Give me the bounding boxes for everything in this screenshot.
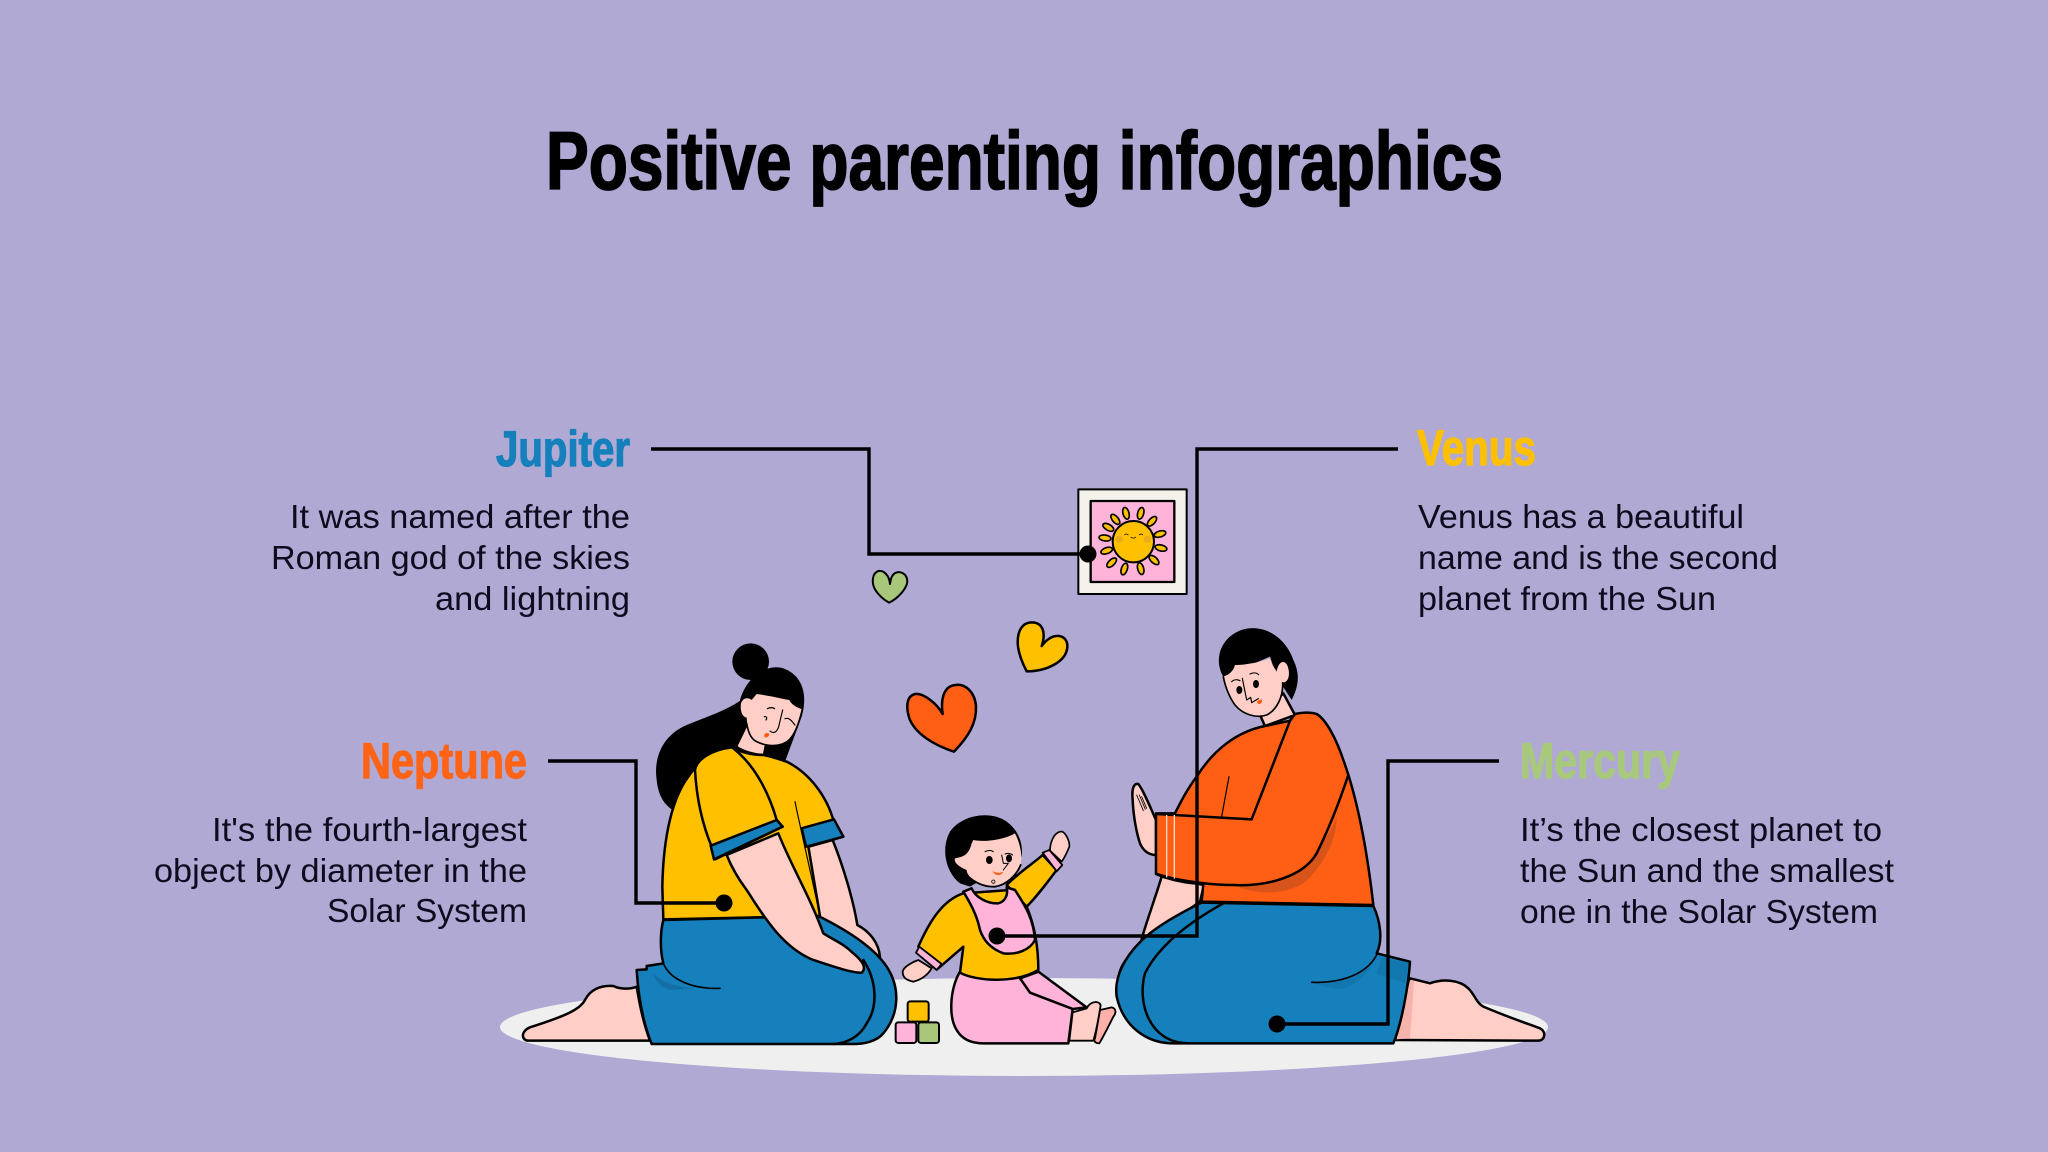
- connector: Venus: [988, 449, 1398, 944]
- text block: Jupiter: Jupiter: [496, 421, 630, 477]
- ground ellipse: [500, 978, 1548, 1076]
- text block: Jupiter: and lightning: [435, 580, 630, 617]
- illustration: baby: [903, 815, 1115, 1043]
- connector: Jupiter: [651, 449, 1096, 562]
- text block: Mercury: the Sun and the smallest: [1520, 852, 1894, 889]
- illustration: mother: [523, 643, 896, 1044]
- illustration: toy blocks: [896, 1001, 939, 1043]
- text block: Mercury: [1520, 733, 1894, 930]
- icon: orange heart: [907, 685, 976, 752]
- icon: green heart: [873, 571, 907, 603]
- text block: Venus: [1417, 420, 1778, 617]
- text block: Jupiter: It was named after the: [290, 498, 630, 535]
- icon: yellow heart: [1018, 622, 1067, 671]
- text block: Neptune: object by diameter in the: [154, 852, 527, 889]
- text block: Neptune: Neptune: [361, 733, 527, 789]
- text block: Jupiter: [271, 421, 630, 617]
- framed sun picture: [1078, 489, 1187, 594]
- text block: Neptune: Solar System: [327, 892, 527, 929]
- text block: Venus: Venus: [1417, 420, 1536, 476]
- text block: Neptune: It's the fourth-largest: [212, 811, 527, 848]
- text block: Venus: Venus has a beautiful: [1418, 498, 1744, 535]
- text block: Venus: planet from the Sun: [1418, 580, 1716, 617]
- title: Positive parenting infographics: [546, 116, 1503, 207]
- text block: Mercury: one in the Solar System: [1520, 893, 1878, 930]
- connector: Neptune: [548, 761, 732, 912]
- illustration: father: [1116, 628, 1544, 1043]
- text block: Jupiter: Roman god of the skies: [271, 539, 630, 576]
- text block: Neptune: [154, 733, 527, 929]
- text block: Mercury: It’s the closest planet to: [1520, 811, 1882, 848]
- text block: Venus: name and is the second: [1418, 539, 1778, 576]
- text block: Mercury: Mercury: [1520, 733, 1680, 789]
- connector: Mercury: [1268, 761, 1499, 1032]
